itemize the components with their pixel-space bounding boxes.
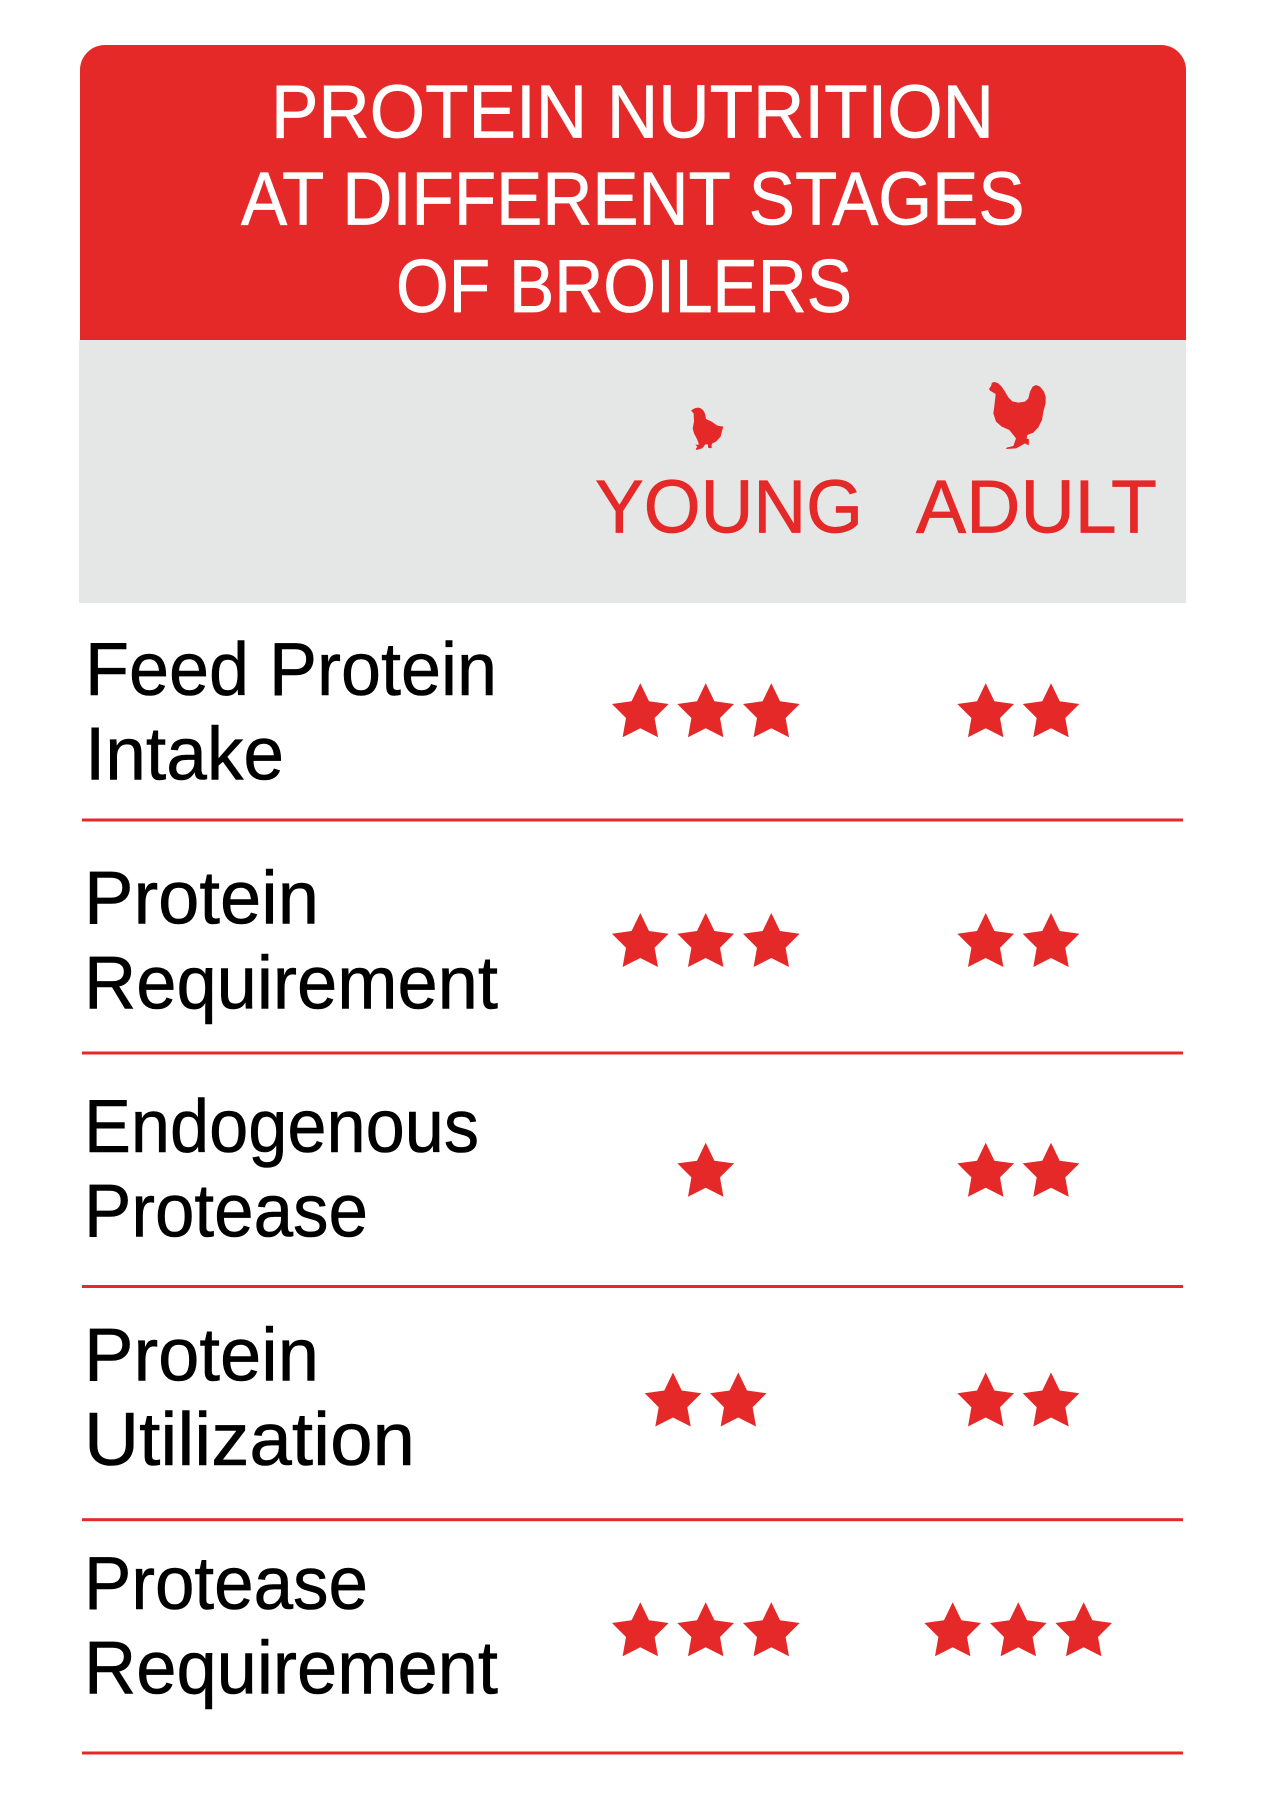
row label bbox=[84, 855, 498, 1024]
column header panel bbox=[79, 340, 1186, 603]
title: OF BROILERS bbox=[396, 244, 852, 328]
row: protein utilization bbox=[84, 1312, 1079, 1481]
row: protein requirement bbox=[84, 855, 1079, 1024]
row label: Requirement bbox=[84, 940, 498, 1024]
adult rating: 2 stars bbox=[957, 683, 1079, 737]
young rating: 3 stars bbox=[612, 1602, 800, 1656]
column label: adult: ADULT bbox=[916, 465, 1157, 549]
title bbox=[241, 69, 1024, 328]
young rating: 3 stars bbox=[612, 913, 800, 967]
row label: Protease bbox=[84, 1541, 368, 1625]
title: AT DIFFERENT STAGES bbox=[241, 157, 1024, 241]
row label: Feed Protein bbox=[85, 627, 497, 711]
row label: Utilization bbox=[84, 1397, 415, 1481]
adult rating: 2 stars bbox=[957, 913, 1079, 967]
row label: Requirement bbox=[84, 1626, 498, 1710]
adult rating: 2 stars bbox=[957, 1372, 1079, 1426]
adult rating: 3 stars bbox=[924, 1602, 1112, 1656]
column label: young: YOUNG bbox=[595, 465, 863, 549]
row: protease requirement bbox=[84, 1541, 1112, 1710]
row label: Endogenous bbox=[84, 1084, 479, 1168]
row label bbox=[84, 1084, 479, 1253]
young rating: 1 star bbox=[677, 1143, 734, 1197]
row label: Protein bbox=[84, 1312, 319, 1396]
adult rating: 2 stars bbox=[957, 1143, 1079, 1197]
row: feed protein intake bbox=[85, 627, 1079, 796]
title: PROTEIN NUTRITION bbox=[271, 69, 994, 153]
icon: adult hen bbox=[989, 382, 1046, 449]
row label: Intake bbox=[85, 712, 284, 796]
header panel bbox=[80, 45, 1186, 340]
row label bbox=[85, 627, 497, 796]
young rating: 2 stars bbox=[645, 1372, 767, 1426]
row label bbox=[84, 1541, 498, 1710]
row label: Protease bbox=[84, 1169, 368, 1253]
young rating: 3 stars bbox=[612, 683, 800, 737]
row: endogenous protease bbox=[84, 1084, 1079, 1253]
row label bbox=[84, 1312, 415, 1481]
icon: young chick bbox=[691, 408, 723, 450]
row label: Protein bbox=[84, 855, 319, 939]
